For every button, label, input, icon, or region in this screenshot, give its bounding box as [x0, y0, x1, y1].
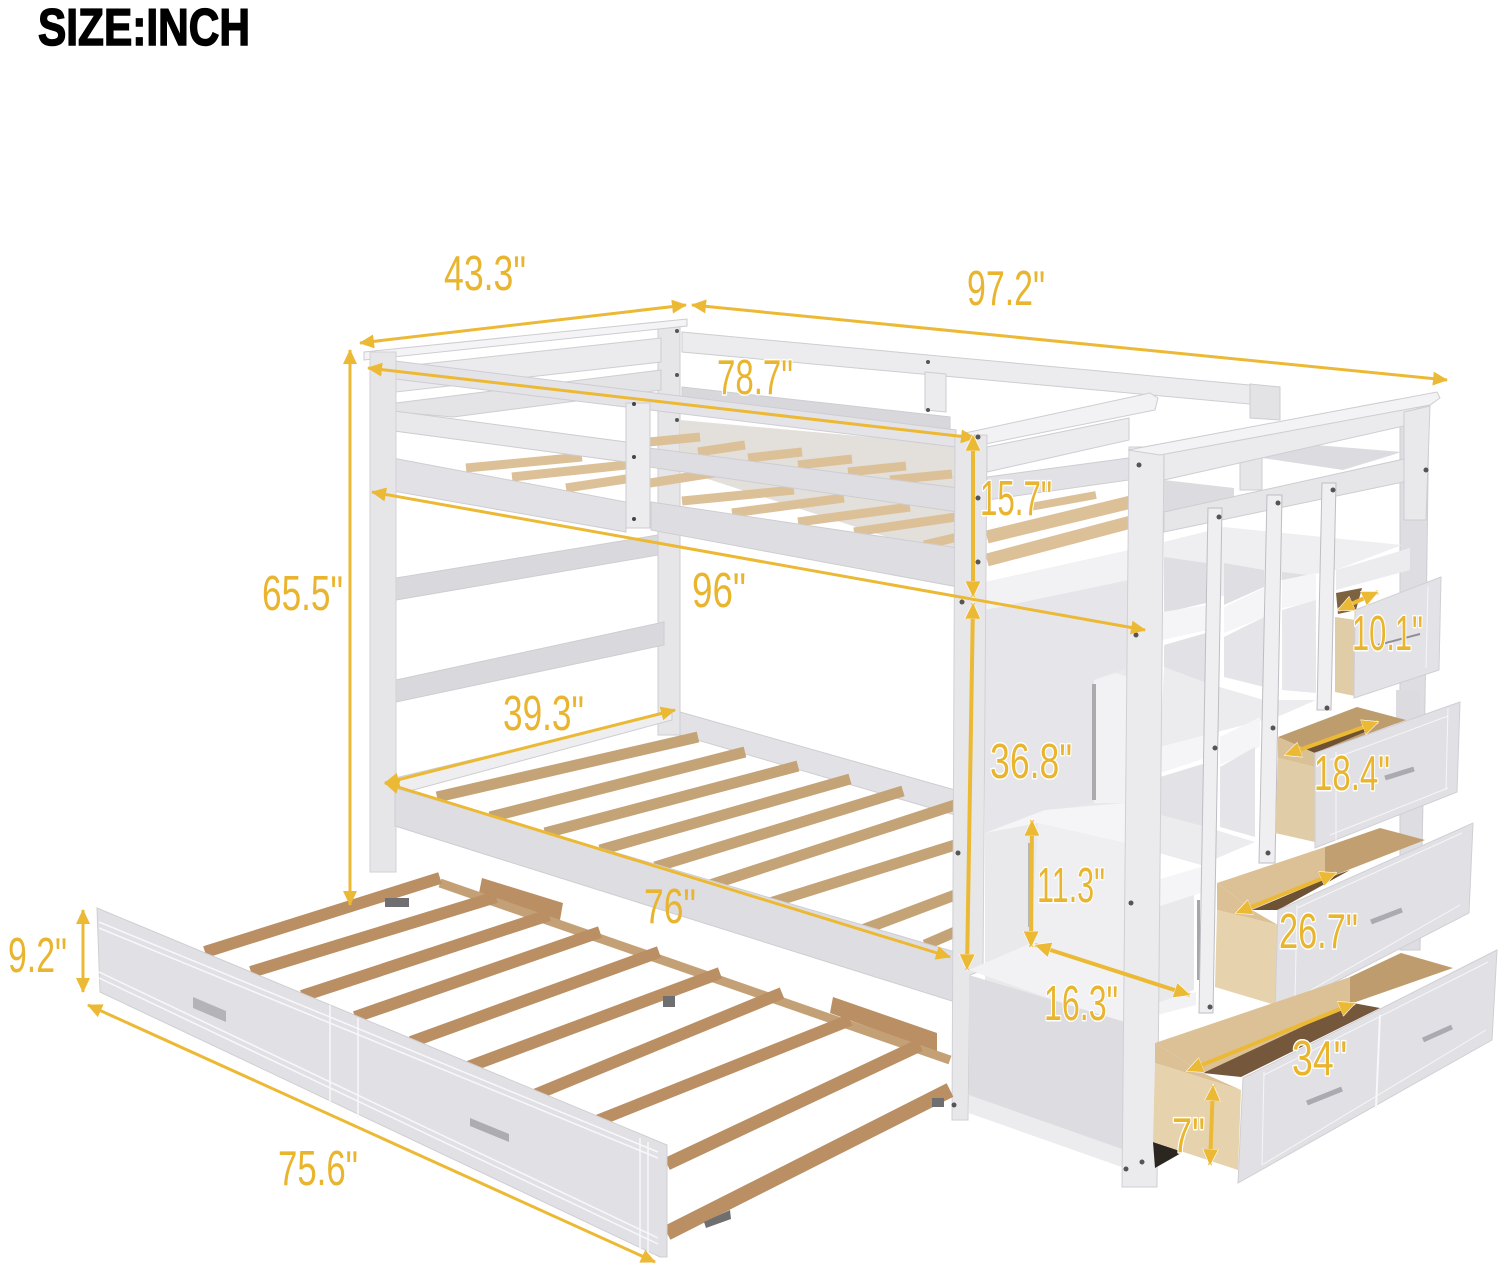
dimension labels: 9.2"	[8, 929, 67, 983]
dimension labels: 7"	[1172, 1109, 1205, 1163]
lower bed slats	[437, 737, 955, 945]
inner dimension arrows	[967, 435, 1378, 1165]
drawer two	[1275, 702, 1460, 848]
far head rail and cap	[364, 319, 687, 392]
dimension labels: 36.8"	[990, 735, 1072, 789]
dimension labels: 16.3"	[1044, 977, 1118, 1031]
lower bed far rail	[680, 712, 955, 815]
dimension labels: 43.3"	[444, 247, 526, 301]
dimension labels	[8, 247, 1423, 1196]
stair bottom box	[969, 943, 1196, 1168]
outer dimension arrows	[83, 305, 1447, 1262]
dimension labels: 76"	[644, 880, 696, 934]
upper bed back panel	[680, 420, 985, 590]
far drawer post	[1396, 690, 1420, 740]
front guard rails	[387, 360, 958, 587]
dimension labels: 15.7"	[980, 472, 1052, 526]
stair ladder uprights	[1199, 483, 1336, 1013]
dimension labels: 34"	[1292, 1032, 1347, 1086]
drawer one	[1335, 577, 1441, 698]
drawer three	[1215, 823, 1473, 1013]
lower bed head and side rails	[395, 712, 955, 1002]
trundle bed slats	[205, 878, 950, 1233]
dimension labels: 75.6"	[278, 1142, 358, 1196]
front left post	[370, 352, 396, 872]
stair bolts	[675, 329, 1428, 1172]
trundle casters	[385, 898, 944, 1228]
dimension labels: 26.7"	[1279, 905, 1358, 959]
stair side panel	[985, 550, 1132, 1170]
dimension labels: 39.3"	[503, 687, 584, 741]
dimension labels: 65.5"	[262, 567, 343, 621]
top right head rails	[1128, 392, 1440, 532]
title: SIZE:INCH	[38, 0, 250, 57]
corner post	[952, 435, 987, 1120]
dimension labels: 18.4"	[1314, 747, 1390, 801]
upper bed slats	[466, 437, 1131, 560]
dimension labels: 11.3"	[1037, 859, 1105, 913]
stair inner shelves	[1157, 445, 1410, 1015]
upper head end at stairs	[965, 393, 1158, 500]
dimension labels: 97.2"	[967, 262, 1045, 316]
dimension labels: 10.1"	[1352, 607, 1423, 661]
head ladder rungs	[396, 535, 664, 702]
main stair post	[1122, 447, 1164, 1187]
far side of frame	[396, 325, 1429, 950]
drawer four	[1153, 950, 1497, 1183]
dimension labels: 78.7"	[717, 351, 793, 405]
dimension labels: 96"	[692, 564, 746, 618]
trundle front panel	[97, 908, 667, 1257]
